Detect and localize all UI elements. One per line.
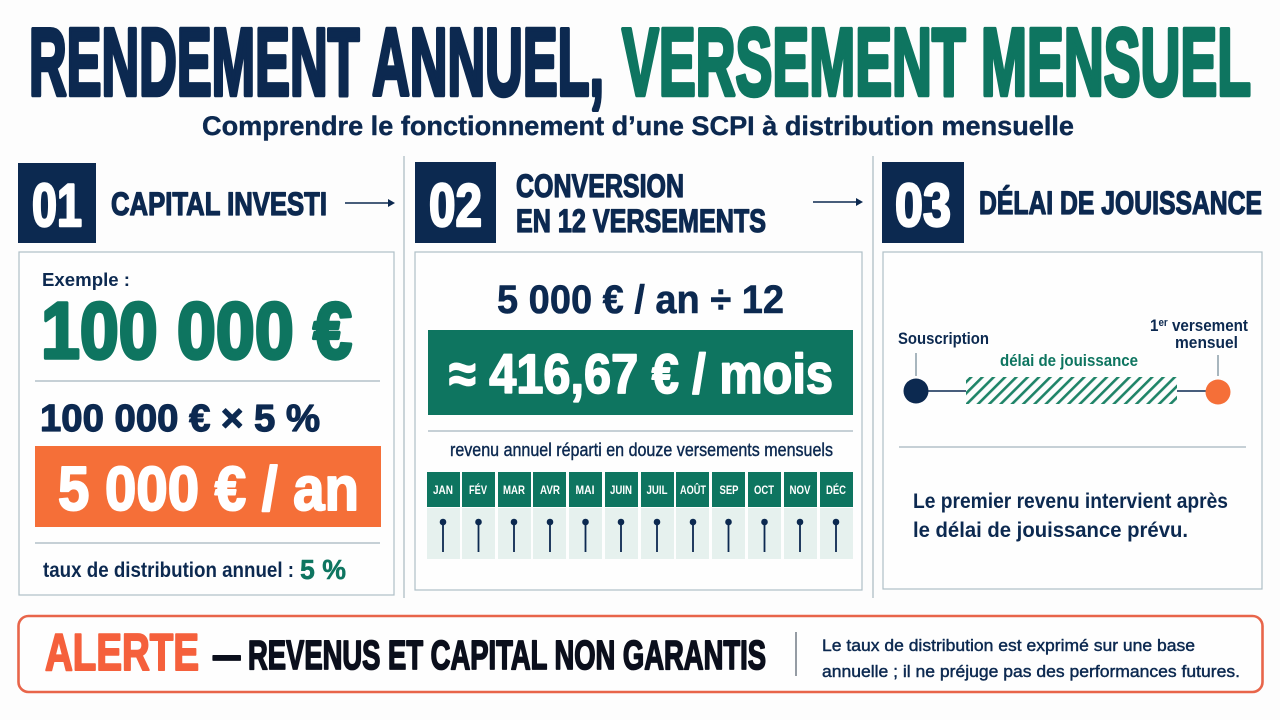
monthly amount banner: ≈ 416,67 € / mois [449, 342, 833, 405]
monthly calendar: AOÛT [680, 482, 707, 497]
timeline: mensuel [1175, 333, 1238, 352]
annual income banner: 5 000 € / an [58, 455, 359, 524]
arrow: step 2 to step 3 [813, 198, 863, 206]
step 3 header [882, 162, 1262, 243]
monthly calendar: JUIL [646, 483, 668, 497]
monthly calendar: JUIN [610, 483, 632, 497]
timeline [898, 316, 1248, 404]
monthly calendar [427, 472, 853, 559]
alert note: Le taux de distribution est exprimé sur une base [822, 636, 1195, 655]
explanation: Le premier revenu intervient après [913, 490, 1228, 513]
alert banner [18, 616, 1262, 692]
distribution rate: 5 % [300, 554, 346, 585]
timeline: Souscription [898, 329, 989, 348]
panel: conversion [415, 252, 862, 590]
example label: Exemple : [42, 269, 130, 290]
step 3 header: 03 [895, 172, 951, 239]
timeline: versement [1168, 316, 1248, 335]
subtitle: Comprendre le fonctionnement d’une SCPI à distribution mensuelle [202, 111, 1074, 141]
step 2 header: 02 [429, 172, 482, 239]
monthly calendar: DÉC [826, 482, 846, 497]
monthly calendar: FÉV [469, 482, 487, 497]
step 1 header: 01 [32, 172, 82, 239]
monthly calendar: MAI [576, 483, 594, 497]
timeline: er [1158, 317, 1168, 329]
step 2 header: EN 12 VERSEMENTS [516, 203, 766, 239]
alert note: annuelle ; il ne préjuge pas des performances futures. [822, 662, 1240, 681]
step 1 header: CAPITAL INVESTI [111, 186, 327, 222]
capital amount: 100 000 € [41, 286, 352, 375]
distribution rate: taux de distribution annuel : [43, 559, 294, 582]
distribution rate [43, 554, 346, 585]
monthly calendar: AVR [540, 483, 560, 497]
monthly calendar: NOV [790, 483, 810, 497]
arrow: step 1 to step 2 [345, 199, 395, 207]
monthly calendar: OCT [754, 483, 775, 497]
calculation: 100 000 € × 5 % [40, 398, 320, 440]
alert heading: — REVENUS ET CAPITAL NON GARANTIS [213, 632, 766, 678]
step 2 header [415, 162, 766, 243]
explanation: le délai de jouissance prévu. [913, 519, 1188, 542]
caption: revenu annuel réparti en douze versements mensuels [450, 440, 833, 460]
panel: capital investi [19, 252, 394, 595]
alert note [822, 636, 1240, 681]
timeline: délai de jouissance [1000, 351, 1138, 370]
step 2 header: CONVERSION [516, 168, 684, 204]
division: 5 000 € / an ÷ 12 [497, 278, 784, 322]
monthly calendar: SEP [720, 483, 738, 497]
timeline: 1 [1150, 316, 1159, 335]
monthly calendar: JAN [433, 483, 453, 497]
monthly amount banner [428, 330, 853, 415]
explanation [913, 490, 1228, 542]
monthly calendar: MAR [503, 483, 525, 497]
step 1 header [18, 163, 327, 243]
alert label: ALERTE [45, 624, 199, 682]
title: RENDEMENT ANNUEL, [29, 9, 604, 116]
panel: délai de jouissance [883, 252, 1262, 589]
